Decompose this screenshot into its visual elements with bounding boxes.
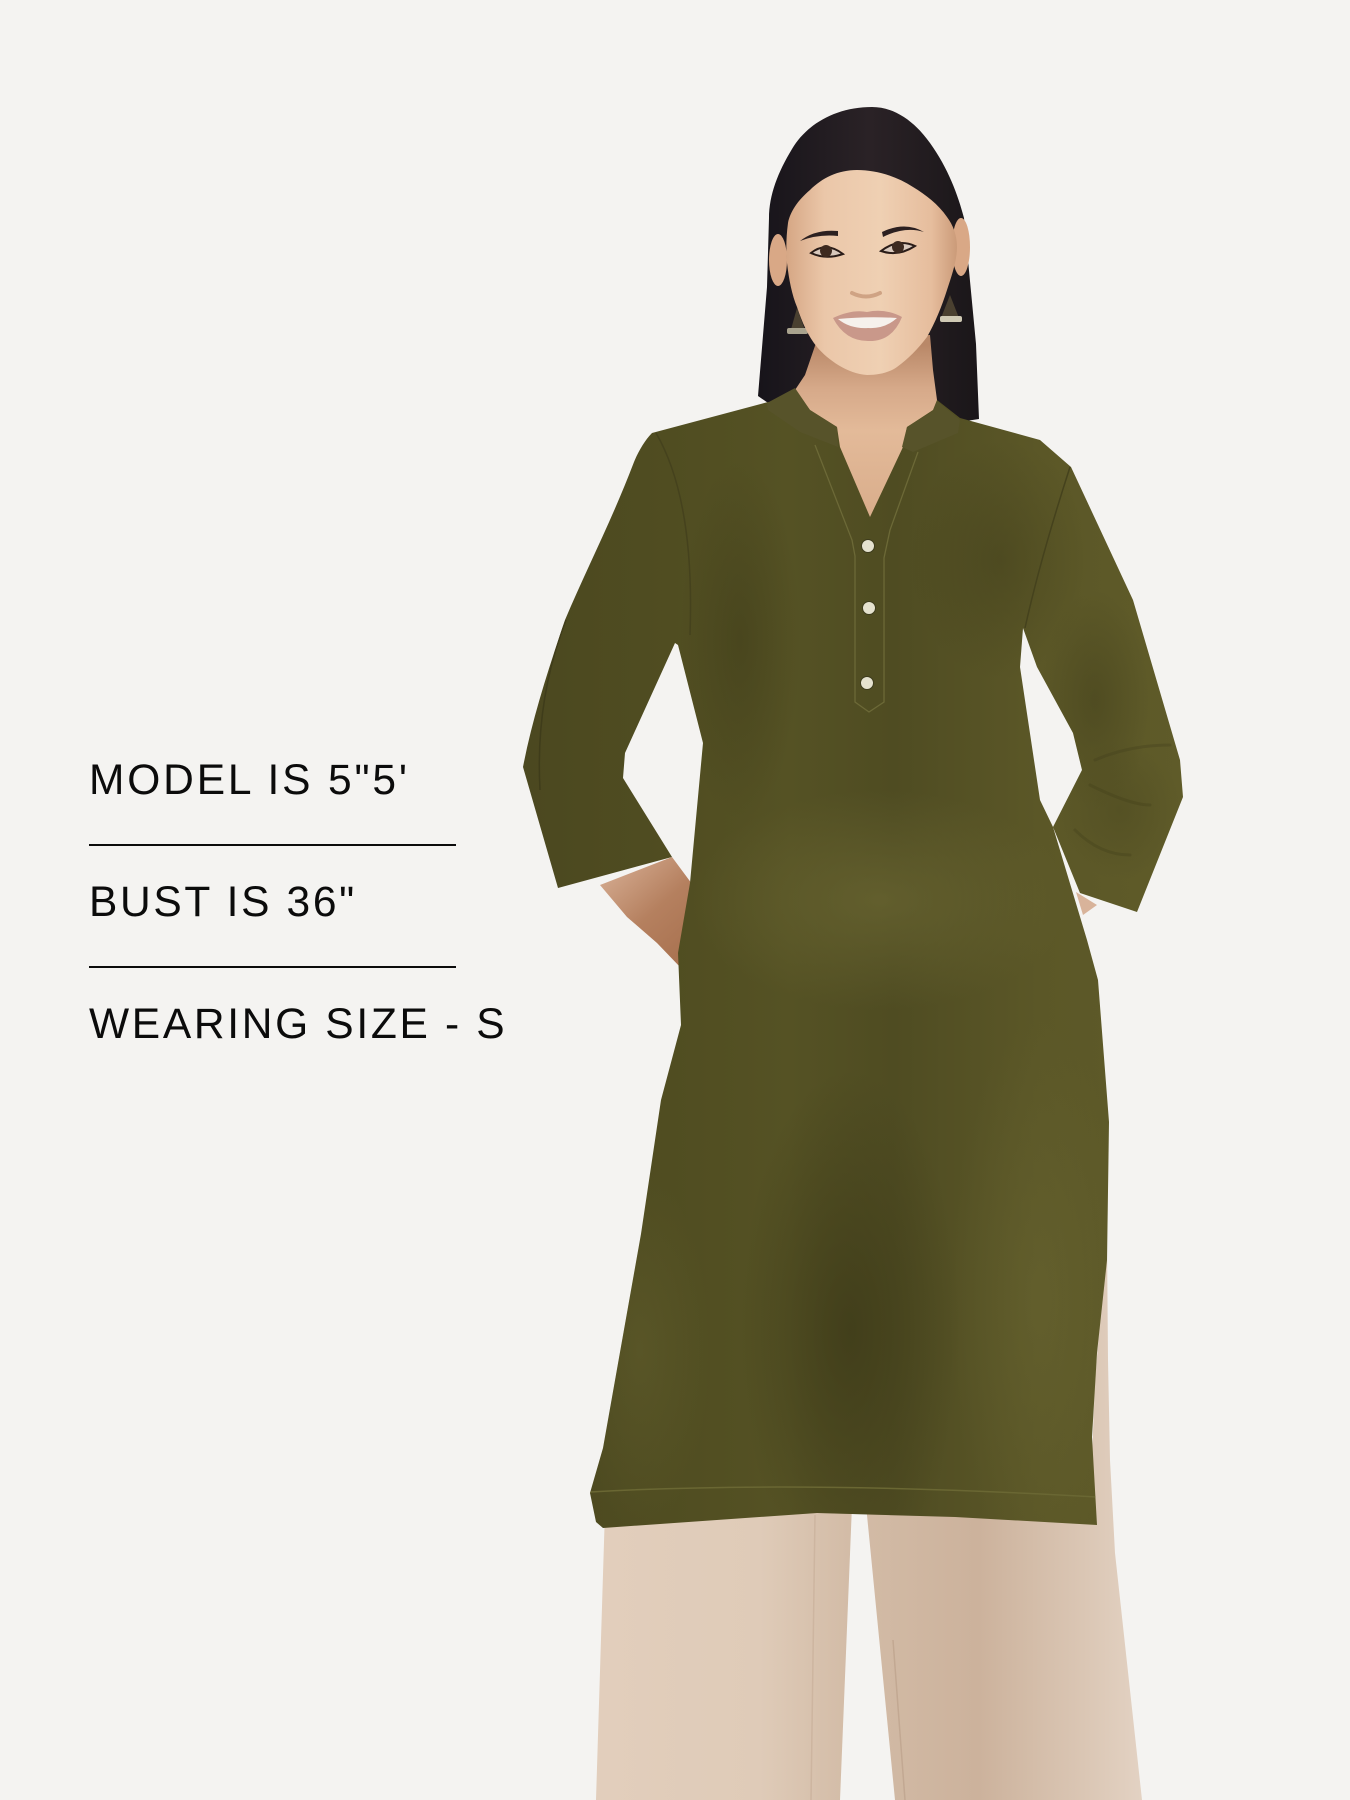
palazzo pants <box>596 1240 1142 1800</box>
hand left <box>600 857 692 968</box>
buttons <box>860 540 876 690</box>
eyebrows <box>800 226 924 241</box>
sleeve creases <box>1075 745 1170 855</box>
kurta <box>523 400 1183 1590</box>
placket <box>815 445 918 712</box>
eyes <box>811 241 915 257</box>
label: bust size: BUST IS 36" <box>89 879 357 926</box>
label: size worn: WEARING SIZE - S <box>89 1001 507 1048</box>
face <box>786 170 957 375</box>
neck and chest <box>795 335 937 517</box>
collar <box>767 388 960 452</box>
label: model height: MODEL IS 5"5' <box>89 757 410 804</box>
model photo illustration <box>523 107 1183 1800</box>
earrings <box>787 295 962 334</box>
size details text block <box>89 757 507 1048</box>
infographic canvas <box>89 107 1183 1800</box>
mouth <box>833 311 902 341</box>
facial features <box>800 226 924 341</box>
nose <box>852 293 880 296</box>
hair <box>758 107 979 425</box>
ears <box>769 218 970 286</box>
hand right <box>1076 892 1097 915</box>
